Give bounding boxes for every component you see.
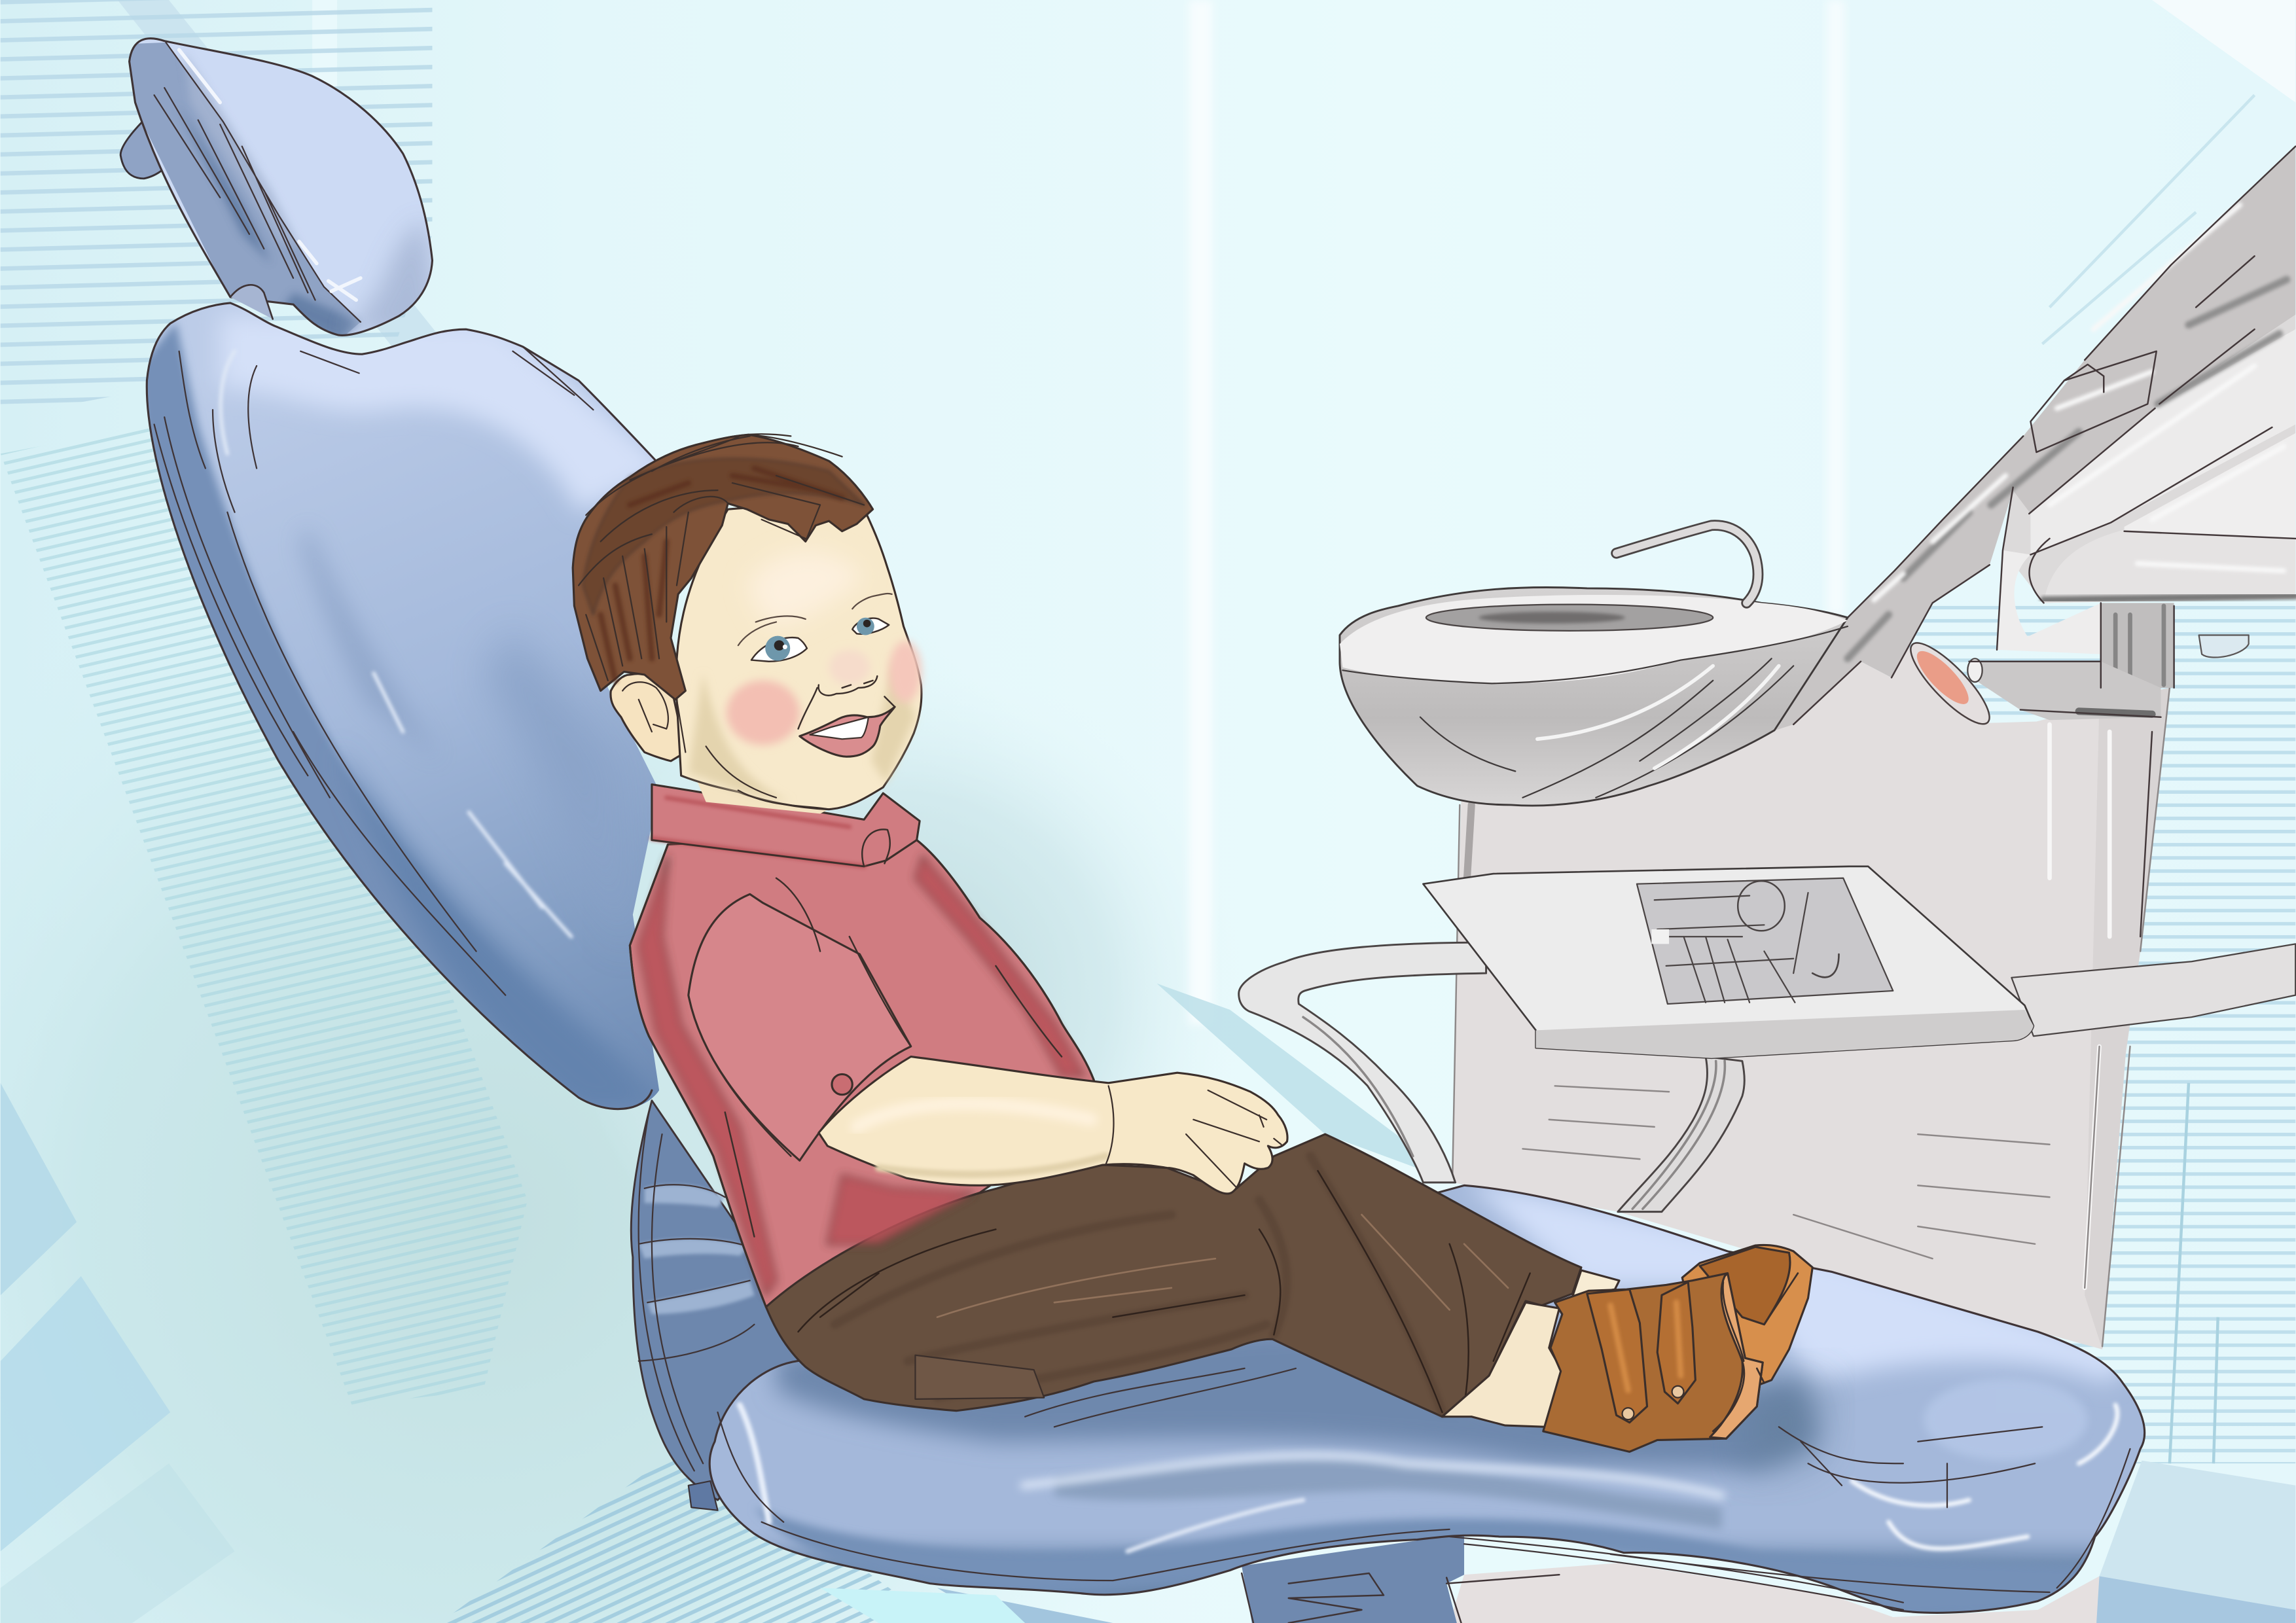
basin [1340,526,1848,806]
socks [1442,1270,1664,1427]
face [676,507,922,810]
shirt [630,785,1094,1307]
lower back hinge [631,1101,834,1510]
seat base [1242,1534,2100,1623]
backrest [139,300,673,1127]
dental unit [1239,147,2295,1349]
headrest [118,29,440,340]
shoes [1543,1245,1812,1452]
neck [689,732,893,813]
cabinet [1452,647,2170,1349]
ear [611,674,685,761]
hair [573,434,873,700]
upper right instrument arms [1757,147,2295,936]
arm and hand [819,1057,1287,1194]
tube arm behind tray [1239,942,1744,1212]
background angular shapes [1,984,2295,1623]
red instrument light [1901,633,2000,734]
trousers [766,1134,1581,1417]
seat cushion [689,1171,2166,1623]
tray with keyboard [1423,866,2295,1058]
boy [573,434,1812,1452]
